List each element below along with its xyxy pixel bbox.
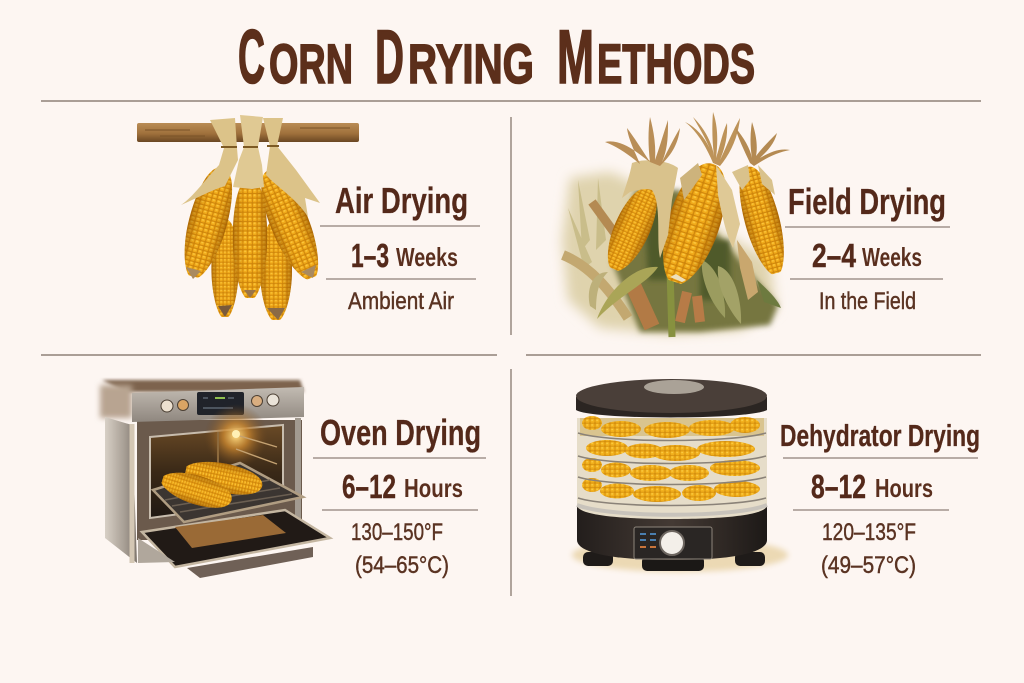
duration: 1–3 weeks: 1–3 [351,237,389,274]
duration: 2–4 weeks [812,237,922,274]
panel: dehydrator drying [572,379,980,579]
temperature range: 120–135°F [822,519,916,546]
icon: corn ears on stalks in a field [562,112,793,337]
duration: 1–3 weeks: Weeks [396,242,458,272]
duration: 8–12 hours: 8–12 [811,468,866,505]
temperature range [351,519,449,579]
duration: 8–12 hours: Hours [875,473,933,503]
icon: hanging corn ears on a wooden pole [137,115,359,320]
temperature range: (54–65°C) [355,552,449,579]
duration: 2–4 weeks: Weeks [862,242,922,272]
duration: 8–12 hours [811,468,933,505]
title: C [238,15,265,100]
duration: 6–12 hours [342,468,463,505]
panel: air drying [137,115,480,320]
panel: field drying [562,112,950,337]
icon: open oven with corn on a tray [100,380,330,578]
temperature range: (49–57°C) [821,552,916,579]
title: RYING [408,32,534,95]
divider lines [41,101,981,596]
temperature range: 130–150°F [351,519,443,546]
duration: 6–12 hours: Hours [404,473,463,503]
heading: oven drying: Oven Drying [320,412,481,453]
title [238,15,755,100]
panel: oven drying [100,380,486,579]
heading: field drying: Field Drying [788,181,946,222]
icon: round food dehydrator with corn trays [572,379,788,572]
condition: ambient air: Ambient Air [348,288,454,315]
title: M [557,15,594,100]
title: ETHODS [597,32,755,95]
duration: 1–3 weeks [351,237,458,274]
duration: 6–12 hours: 6–12 [342,468,396,505]
condition: in the field: In the Field [819,288,916,315]
heading: air drying: Air Drying [335,180,468,221]
title: D [375,15,404,100]
duration: 2–4 weeks: 2–4 [812,237,857,274]
title: ORN [269,32,353,95]
temperature range [821,519,916,579]
